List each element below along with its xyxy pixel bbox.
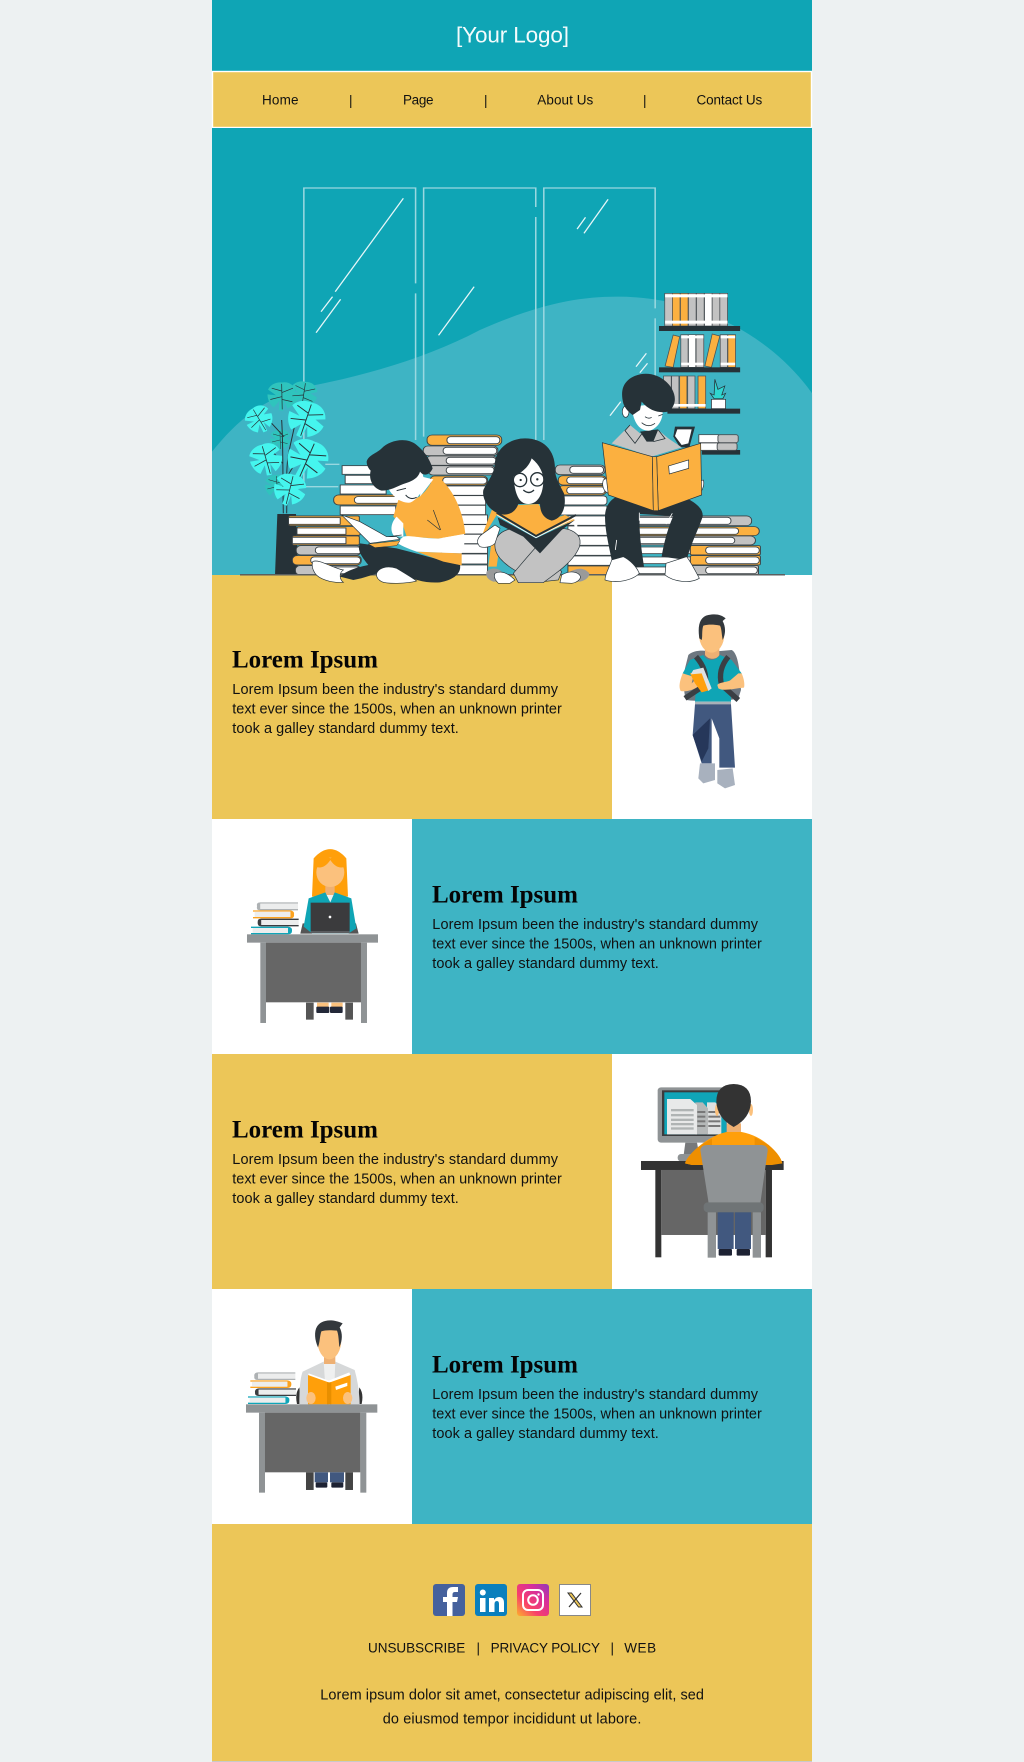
row 1 panel [212,575,812,819]
row 4 text: text ever since the 1500s, when an unknown printer [432,1406,762,1422]
person: reader on the left [312,440,465,583]
row 4 panel [212,1289,812,1524]
row 3 text [232,1152,562,1207]
row 2 heading: Lorem Ipsum [432,882,578,908]
navigation bar: | [484,93,488,108]
person: girl with glasses [478,438,589,583]
footer links: | [476,1640,480,1655]
icon: woman at laptop [247,849,378,1023]
footer panel [212,1524,812,1762]
person: boy with big book [602,374,704,582]
hero scenery [212,188,812,575]
icon: linkedin [475,1584,507,1616]
header with logo [212,0,812,71]
icon: x [560,1584,590,1616]
row 2 text: Lorem Ipsum been the industry's standard dummy [432,917,759,933]
footer links: PRIVACY POLICY [491,1640,600,1655]
row 1 text: Lorem Ipsum been the industry's standard dummy [232,682,559,698]
icon: man reading at desk [246,1320,377,1493]
navigation bar: Home [262,92,298,108]
row 4 text [432,1387,762,1442]
row 3 text: took a galley standard dummy text. [232,1191,459,1207]
footer links [368,1640,656,1655]
navigation bar: | [349,93,353,108]
row 3 heading: Lorem Ipsum [232,1116,378,1144]
icon: facebook [433,1584,465,1616]
footer text [320,1687,704,1727]
header with logo: [Your Logo] [456,23,569,48]
floor line [240,574,785,576]
footer links: WEB [624,1640,656,1655]
row 1 text [232,682,562,737]
row 1 heading: Lorem Ipsum [232,646,378,674]
row 4 text: took a galley standard dummy text. [432,1426,659,1442]
row 4 heading: Lorem Ipsum [432,1352,578,1378]
icon: instagram [517,1584,549,1616]
row 2 text [432,917,762,972]
bookshelves [659,293,740,455]
row 1 text: text ever since the 1500s, when an unknown printer [232,702,562,718]
icon: man at desktop computer [641,1084,784,1258]
row 2 text: took a galley standard dummy text. [432,956,659,972]
footer links: | [610,1640,614,1655]
footer links: UNSUBSCRIBE [368,1640,465,1655]
hero illustration [212,188,812,583]
hero background [212,128,812,575]
navigation bar: About Us [537,92,594,108]
footer text: Lorem ipsum dolor sit amet, consectetur adipiscing elit, sed [320,1687,704,1703]
plant [241,379,334,575]
stacked books [289,435,760,575]
navigation bar: | [643,93,647,108]
footer text: do eiusmod tempor incididunt ut labore. [383,1711,641,1727]
row 3 panel [212,1054,812,1289]
icon: student with backpack [680,614,744,788]
row 4 text: Lorem Ipsum been the industry's standard dummy [432,1387,759,1403]
window glare [316,198,648,416]
windows [304,188,655,487]
row 3 text: Lorem Ipsum been the industry's standard dummy [232,1152,559,1168]
navigation bar: Contact Us [696,92,763,108]
hill shape [212,297,812,575]
row 2 panel [212,819,812,1054]
row 1 text: took a galley standard dummy text. [232,721,459,737]
row 3 text: text ever since the 1500s, when an unknown printer [232,1172,562,1188]
navigation bar [212,72,812,128]
row 2 text: text ever since the 1500s, when an unknown printer [432,936,762,952]
navigation bar: Page [403,92,434,108]
